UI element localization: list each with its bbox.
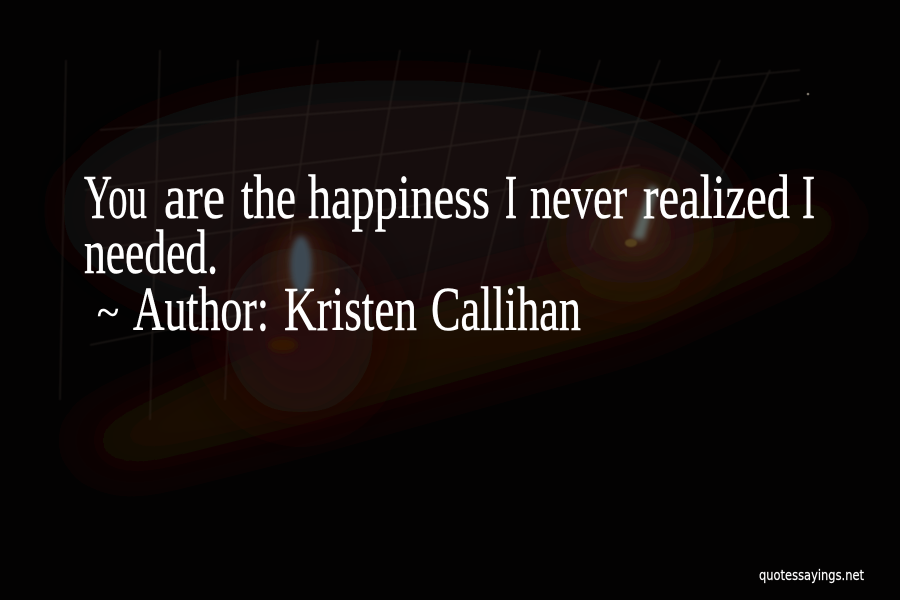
quote text — [84, 164, 815, 287]
quote text: are — [164, 164, 225, 232]
author line — [97, 276, 581, 344]
quote text: never — [530, 164, 627, 232]
quote text: the — [241, 164, 296, 232]
distant light — [807, 93, 809, 95]
watermark: quotessayings.net — [759, 568, 864, 584]
author line: Callihan — [431, 276, 581, 344]
quote text: I — [505, 164, 517, 232]
quote text: I — [802, 164, 815, 232]
quote text: You — [84, 164, 147, 232]
left candle flame — [269, 228, 324, 352]
author line: Author: — [133, 276, 269, 344]
author line: Kristen — [284, 276, 417, 344]
window grid lines — [60, 40, 800, 420]
author line: ~ — [97, 290, 119, 335]
quote text: happiness — [308, 164, 490, 232]
quote text: needed. — [84, 219, 218, 287]
quote text: realized — [643, 164, 790, 232]
right candle flame — [616, 177, 658, 253]
